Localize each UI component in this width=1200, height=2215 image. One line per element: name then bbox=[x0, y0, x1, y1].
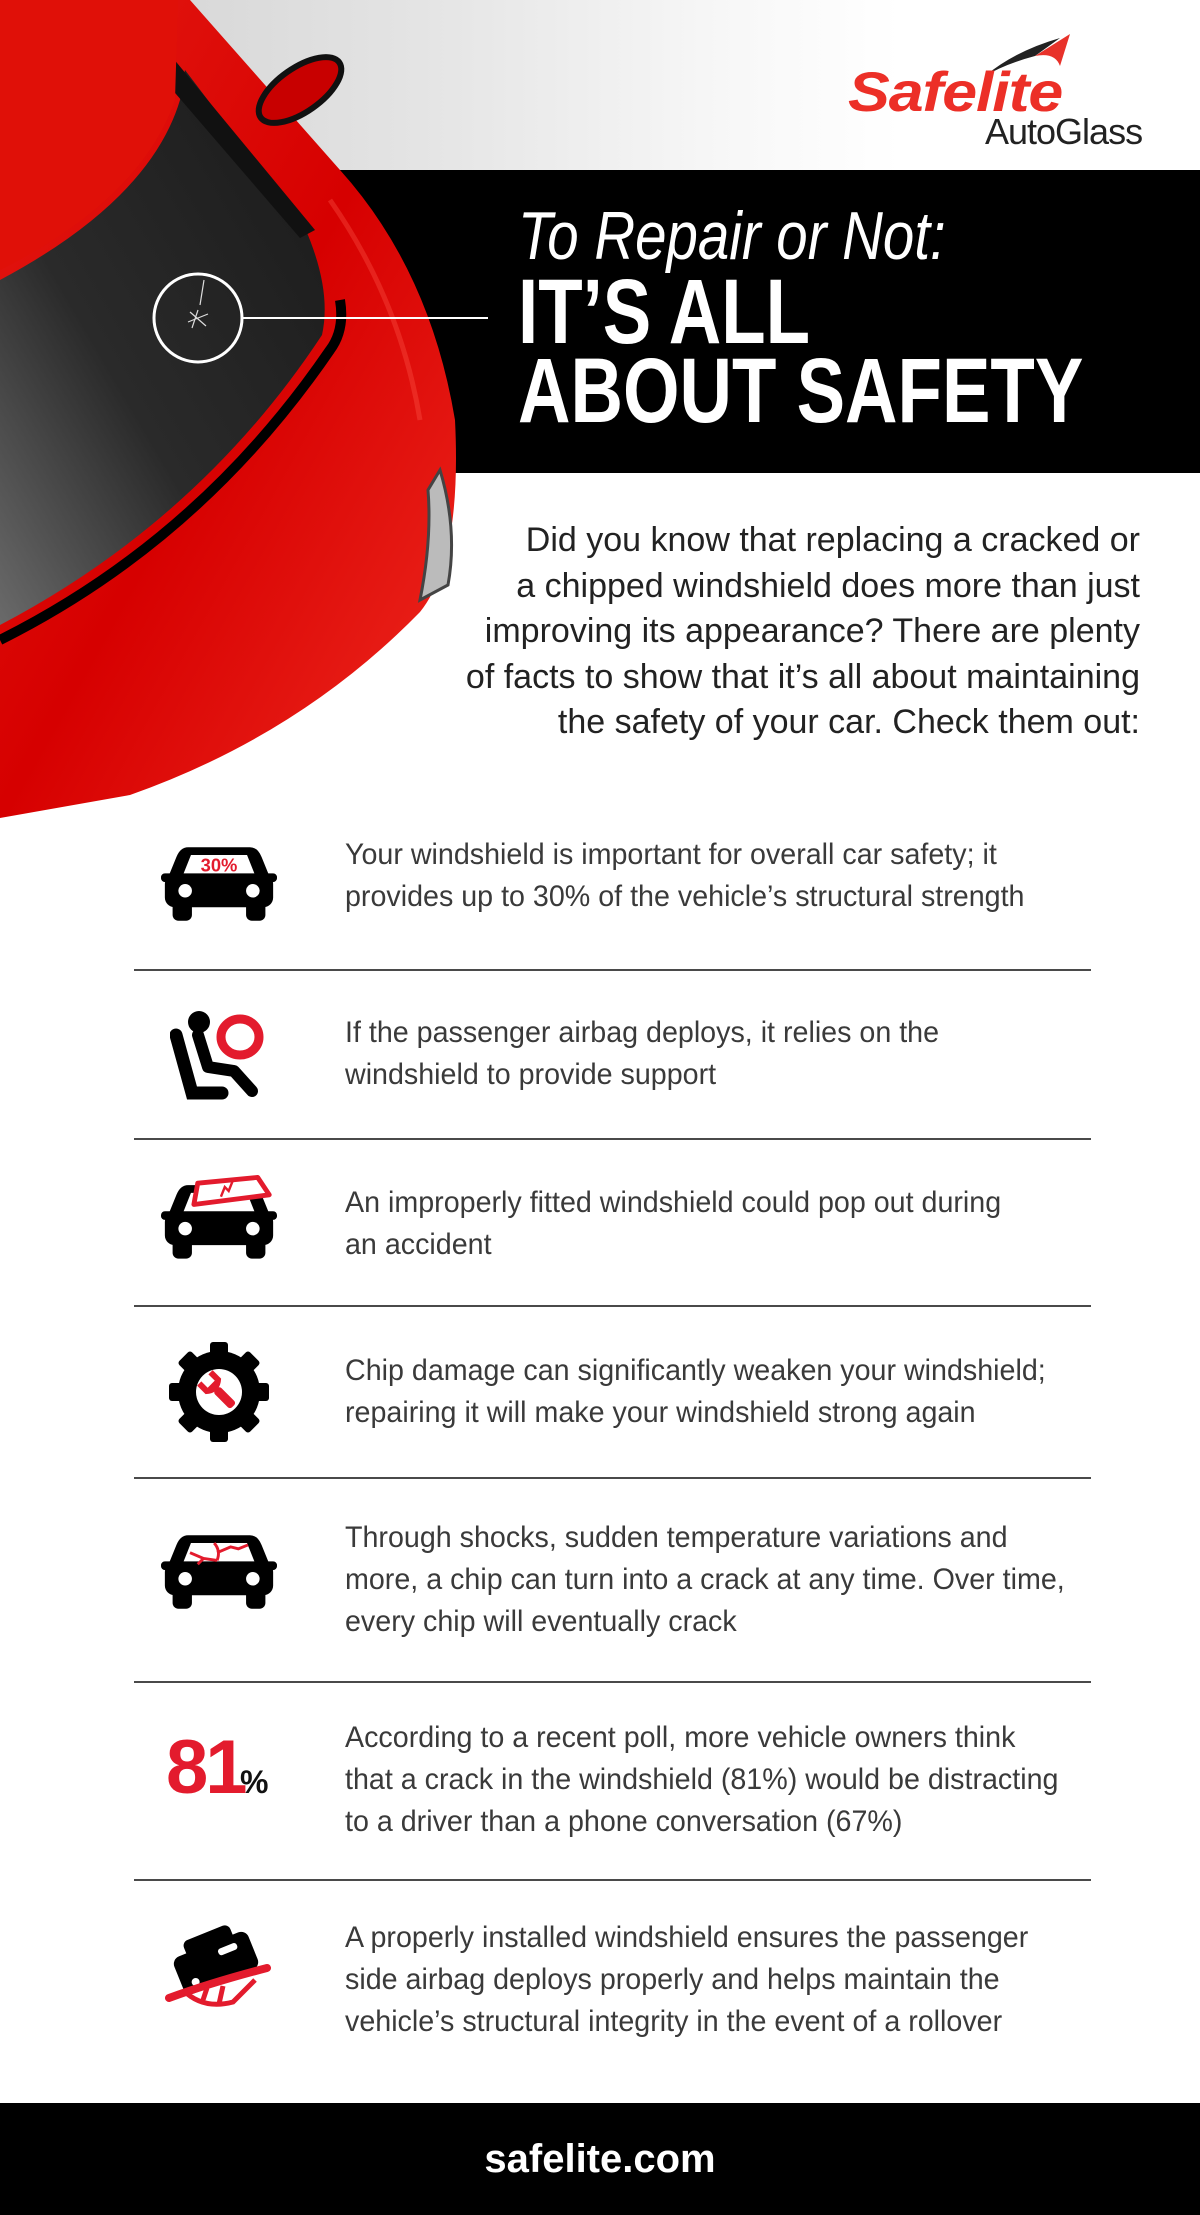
item 2 icon: airbag seat bbox=[170, 1011, 264, 1100]
top background gradient bbox=[0, 0, 1200, 175]
title: ABOUT SAFETY bbox=[518, 340, 1083, 442]
intro text: Did you know that replacing a cracked or bbox=[526, 521, 1140, 559]
item 1 text: provides up to 30% of the vehicle’s structural strength bbox=[345, 880, 1024, 913]
item 6 text: According to a recent poll, more vehicle owners think bbox=[345, 1721, 1015, 1754]
intro text bbox=[466, 521, 1140, 741]
item 2 text bbox=[345, 1016, 939, 1091]
logo text: Safelite bbox=[848, 60, 1062, 123]
item 1 icon: car 30% bbox=[161, 847, 277, 921]
item 5 text: more, a chip can turn into a crack at any time. Over time, bbox=[345, 1563, 1065, 1596]
footer bbox=[0, 2103, 1200, 2215]
item 1 icon: car 30%: 30% bbox=[201, 854, 237, 875]
item 4 icon: gear wrench bbox=[169, 1342, 269, 1442]
intro text: of facts to show that it’s all about maintaining bbox=[466, 658, 1140, 696]
item 6 text bbox=[345, 1721, 1058, 1838]
item 6 icon: 81%: % bbox=[240, 1764, 268, 1800]
item 7 text: vehicle’s structural integrity in the event of a rollover bbox=[345, 2005, 1002, 2038]
item 3 icon: windshield popping bbox=[161, 1175, 277, 1259]
item 3 text bbox=[345, 1186, 1001, 1261]
item 6 text: that a crack in the windshield (81%) would be distracting bbox=[345, 1763, 1058, 1796]
item 2 text: windshield to provide support bbox=[345, 1058, 716, 1091]
item 4 text: Chip damage can significantly weaken your windshield; bbox=[345, 1354, 1046, 1387]
intro text: the safety of your car. Check them out: bbox=[558, 703, 1140, 741]
item 6 icon: 81%: 81 bbox=[166, 1725, 245, 1810]
item 1 text bbox=[345, 838, 1024, 913]
logo: AutoGlass bbox=[985, 111, 1142, 152]
item 7 text: side airbag deploys properly and helps maintain the bbox=[345, 1963, 1000, 1996]
item 2 text: If the passenger airbag deploys, it relies on the bbox=[345, 1016, 939, 1049]
title bbox=[518, 198, 1083, 442]
item 7 text bbox=[345, 1921, 1028, 2038]
item 3 text: An improperly fitted windshield could pop out during bbox=[345, 1186, 1001, 1219]
item 3 text: an accident bbox=[345, 1228, 492, 1261]
title: IT’S ALL bbox=[518, 261, 810, 363]
logo bbox=[848, 34, 1142, 152]
title band bbox=[300, 170, 1200, 473]
item 6 text: to a driver than a phone conversation (67%) bbox=[345, 1805, 902, 1838]
item 4 text bbox=[345, 1354, 1046, 1429]
item 7 text: A properly installed windshield ensures the passenger bbox=[345, 1921, 1028, 1954]
item 1 text: Your windshield is important for overall car safety; it bbox=[345, 838, 997, 871]
footer: safelite.com bbox=[484, 2137, 716, 2181]
crack callout bbox=[154, 274, 488, 362]
item 5 text bbox=[345, 1521, 1065, 1638]
title: To Repair or Not: bbox=[518, 198, 946, 274]
item 5 text: every chip will eventually crack bbox=[345, 1605, 737, 1638]
intro text: a chipped windshield does more than just bbox=[516, 566, 1140, 604]
item 5 icon: cracked car bbox=[161, 1535, 277, 1609]
item 4 text: repairing it will make your windshield strong again bbox=[345, 1396, 976, 1429]
item 7 icon: rollover car bbox=[165, 1925, 271, 2007]
logo swoosh bbox=[992, 34, 1070, 71]
car illustration bbox=[0, 0, 488, 818]
item 5 text: Through shocks, sudden temperature variations and bbox=[345, 1521, 1008, 1554]
intro text: improving its appearance? There are plenty bbox=[485, 612, 1140, 650]
